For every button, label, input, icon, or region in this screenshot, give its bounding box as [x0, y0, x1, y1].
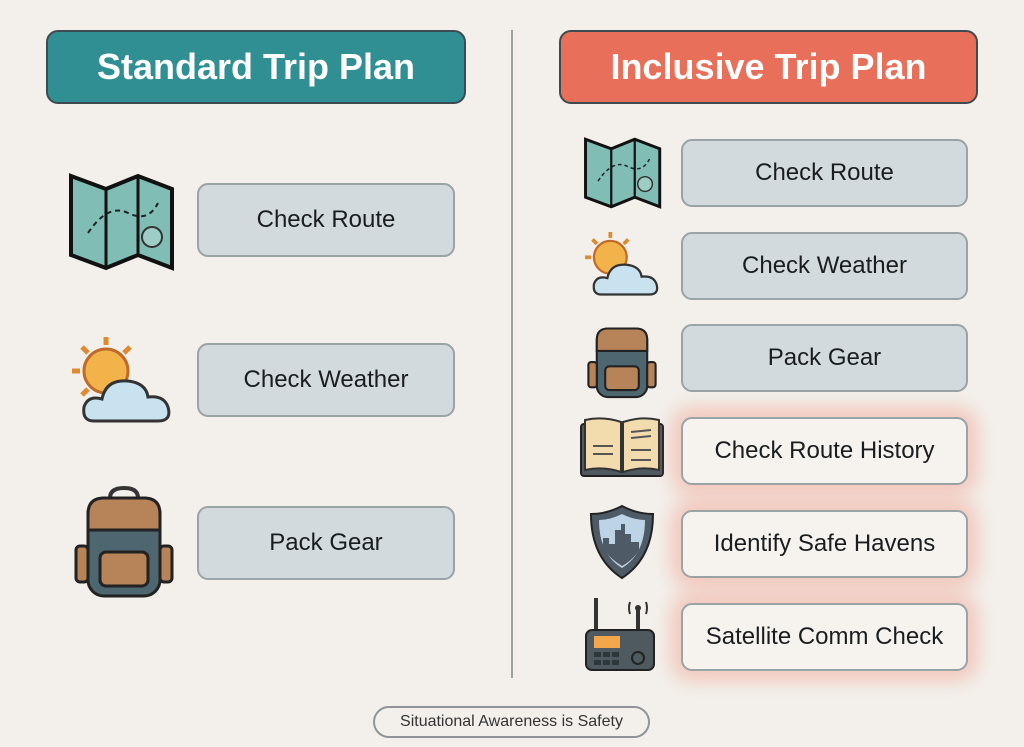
icon: weather left [72, 337, 170, 422]
box: satellite comm check: Satellite Comm Check [706, 623, 943, 650]
footer pill [373, 706, 650, 738]
box: check weather left [197, 343, 455, 417]
box: identify safe havens [681, 510, 968, 578]
box: check route right [681, 139, 968, 207]
box: check route right: Check Route [755, 159, 894, 186]
heading: standard [46, 30, 466, 104]
heading: inclusive [559, 30, 978, 104]
box: check weather right: Check Weather [742, 252, 907, 279]
icon: backpack right [587, 328, 657, 398]
icon: book [580, 417, 664, 477]
box: pack gear right: Pack Gear [768, 344, 881, 371]
box: check route history: Check Route History [714, 437, 935, 464]
box: check weather right [681, 232, 968, 300]
box: pack gear right [681, 324, 968, 392]
heading: inclusive: Inclusive Trip Plan [610, 46, 927, 87]
icon: radio [585, 598, 655, 671]
icon: map right [584, 137, 662, 209]
box: identify safe havens: Identify Safe Havens [714, 530, 935, 557]
icon: shield [590, 504, 654, 580]
box: pack gear left: Pack Gear [269, 529, 383, 556]
box: check route history [681, 417, 968, 485]
box: check weather left: Check Weather [244, 366, 408, 393]
heading: standard: Standard Trip Plan [97, 46, 415, 87]
footer pill: Situational Awareness is Safety [400, 713, 623, 730]
box: pack gear left [197, 506, 455, 580]
icon: map left [69, 173, 174, 271]
box: satellite comm check [681, 603, 968, 671]
icon: weather right [585, 232, 658, 296]
divider [511, 30, 513, 678]
box: check route left [197, 183, 455, 257]
icon: backpack left [74, 486, 174, 598]
box: check route left: Check Route [257, 206, 395, 233]
